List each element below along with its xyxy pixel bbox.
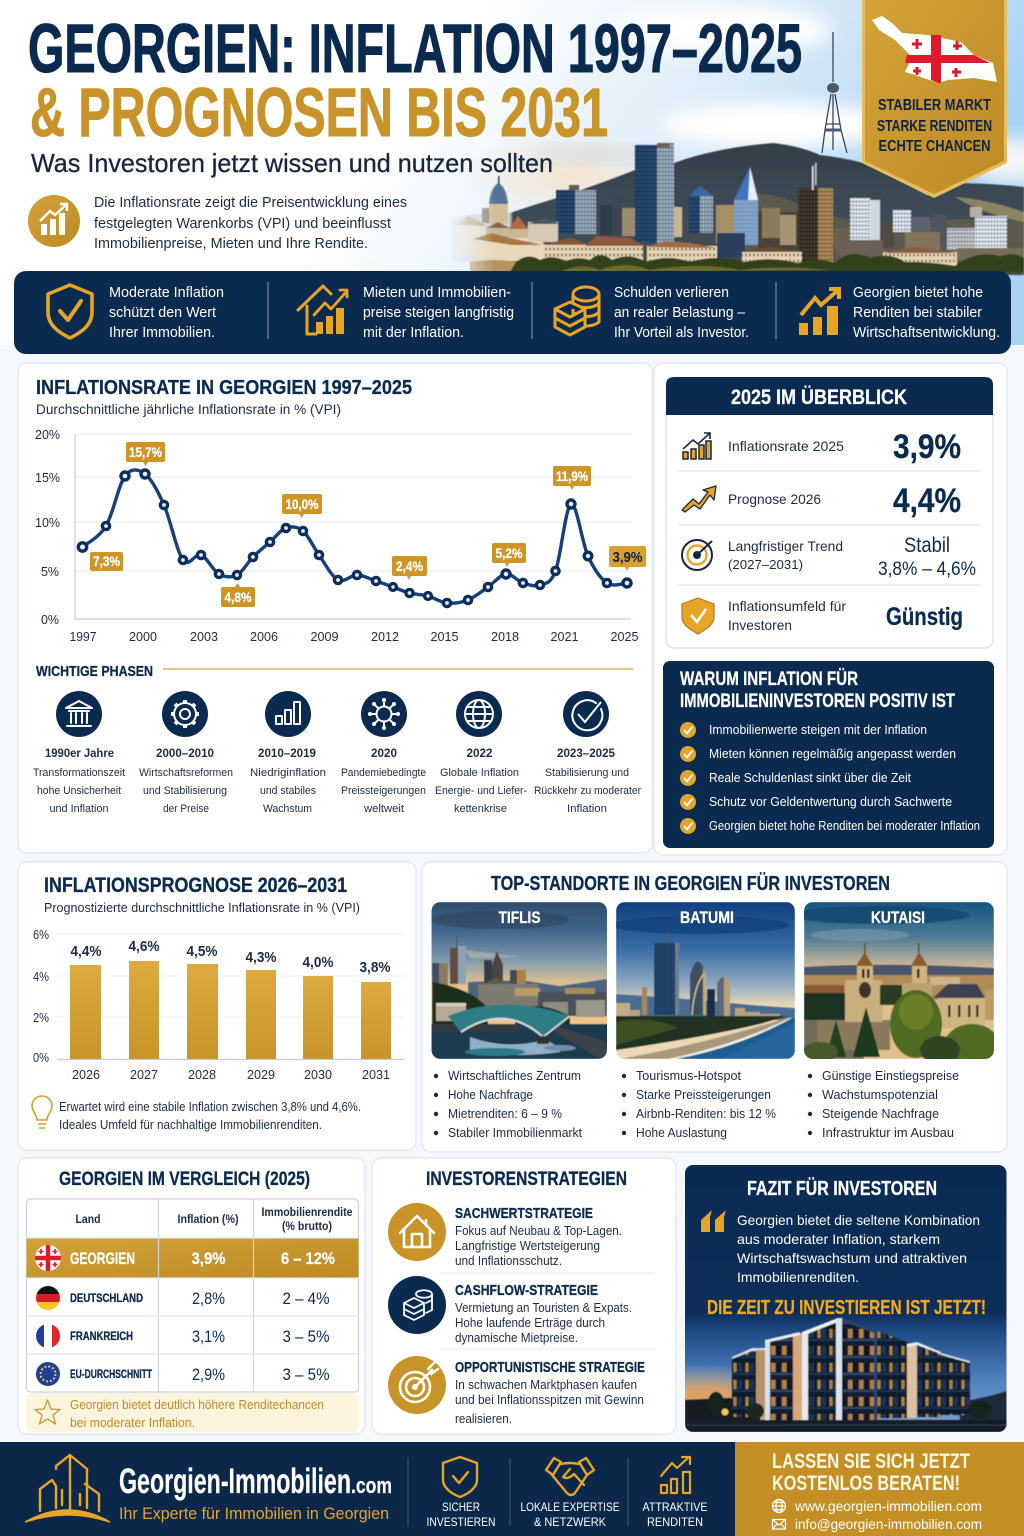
list: Batumi: Airbnb-Renditen: bis 12 % — [636, 1106, 776, 1121]
benefit text 2: preise steigen langfristig — [363, 304, 514, 321]
list: Kutaisi: Günstige Einstiegspreise — [822, 1068, 959, 1083]
conclusion text: Wirtschaftswachstum und attraktiven — [737, 1250, 967, 1266]
row: EU: EU-DURCHSCHNITT — [70, 1367, 152, 1381]
comparison table: Land — [76, 1214, 100, 1226]
panel: why inflation is positive — [663, 661, 994, 848]
list: Batumi: Starke Preissteigerungen — [636, 1087, 771, 1102]
skyline illustration — [452, 143, 1024, 275]
panel: why inflation is positive: WARUM INFLATION FÜR — [680, 669, 858, 690]
line chart: inflation 1997-2025: 0% — [41, 612, 59, 627]
phase: 1990er Jahre — [33, 691, 125, 815]
strategy: Cashflow: Vermietung an Touristen & Expats. — [455, 1300, 632, 1315]
overview row: inflation rate — [683, 428, 961, 466]
panel: forecast — [18, 862, 416, 1150]
forecast note: Ideales Umfeld für nachhaltige Immobilienrenditen. — [59, 1118, 322, 1132]
phase: 1990er Jahre: Transformationszeit — [33, 767, 125, 779]
overview row: climate: Investoren — [728, 618, 792, 633]
icon: quote marks — [701, 1210, 726, 1232]
benefit text 1 — [109, 284, 224, 341]
intro text — [94, 194, 407, 252]
callout: 3,9% — [609, 546, 646, 571]
bar chart: forecast: 3,8% — [360, 960, 391, 976]
bar chart: forecast: 6% — [33, 928, 49, 942]
overview row: climate — [682, 598, 963, 634]
intro text: festgelegten Warenkorbs (VPI) und beeinflusst — [94, 215, 392, 232]
bar chart: forecast: 2026 — [72, 1068, 100, 1082]
list: Kutaisi: Wachstumspotenzial — [822, 1087, 938, 1102]
callout: 15,7%: 15,7% — [129, 444, 162, 460]
callout: 15,7% — [126, 442, 165, 466]
bar chart: forecast: 4,0% — [302, 955, 334, 971]
benefit text 1: schützt den Wert — [109, 304, 217, 321]
feature: safe investing — [426, 1457, 496, 1529]
panel: top locations — [422, 862, 1007, 1152]
line chart: inflation 1997-2025: 10% — [35, 515, 60, 530]
feature: local expertise: LOKALE EXPERTISE — [520, 1500, 620, 1514]
row: Georgien: 3,9% — [192, 1249, 226, 1268]
phase: 2022 — [435, 691, 527, 815]
strategy: Sachwert: Langfristige Wertsteigerung — [455, 1238, 600, 1253]
chart heading: INFLATIONSRATE IN GEORGIEN 1997–2025 — [36, 376, 412, 399]
conclusion text: aus moderater Inflation, starkem — [737, 1231, 940, 1247]
row: EU — [36, 1362, 330, 1386]
footer — [0, 1442, 1024, 1536]
line chart: inflation 1997-2025: 5% — [41, 564, 59, 579]
title — [28, 10, 802, 151]
list: Kutaisi: Steigende Nachfrage — [822, 1106, 939, 1121]
phase: 2010-2019: und stabiles — [260, 785, 316, 797]
strategy: Cashflow: Hohe laufende Erträge durch — [455, 1315, 605, 1330]
phase: 2000-2010 — [139, 691, 233, 815]
benefit text 3 — [614, 284, 749, 341]
row: Deutschland: 2 – 4% — [282, 1289, 330, 1308]
row: EU: 3 – 5% — [282, 1365, 330, 1384]
overview heading — [666, 377, 993, 415]
callout: 10,0%: 10,0% — [286, 496, 319, 512]
phase: 2020: weltweit — [363, 803, 404, 815]
bar chart: forecast: 4,4% — [70, 944, 102, 960]
list: Kutaisi: Infrastruktur im Ausbau — [822, 1125, 954, 1140]
row: EU: 2,9% — [192, 1365, 225, 1384]
chart heading: Durchschnittliche jährliche Inflationsrate in % (VPI) — [36, 402, 341, 417]
callout: 5,2%: 5,2% — [496, 545, 523, 561]
bar chart: forecast: 4,6% — [128, 939, 160, 955]
overview row: trend: (2027–2031) — [728, 557, 803, 572]
brand name: .com — [351, 1473, 392, 1498]
feature: local expertise — [520, 1458, 620, 1529]
icon: mail — [772, 1520, 786, 1529]
phase: 2010-2019: Wachstum — [263, 803, 312, 815]
callout: 3,9%: 3,9% — [612, 549, 642, 566]
overview row: forecast: Prognose 2026 — [728, 492, 821, 507]
list: Kutaisi — [808, 1068, 959, 1140]
line chart: inflation 1997-2025: 2021 — [550, 629, 578, 644]
callout: 5,2% — [492, 543, 526, 567]
icon: globe — [772, 1500, 786, 1512]
bar chart: forecast: 2% — [33, 1011, 49, 1025]
photo label: Tiflis: TIFLIS — [498, 909, 540, 927]
bar chart: forecast: 4,3% — [246, 950, 277, 966]
badge: gold ribbon: STABILER MARKT — [878, 97, 991, 114]
phase: 2010-2019: Niedriginflation — [250, 767, 326, 779]
panel: 2025 overview outer — [654, 363, 1007, 855]
panel: key benefits strip — [14, 271, 1011, 354]
strategy: Sachwert: Fokus auf Neubau & Top-Lagen. — [455, 1223, 622, 1238]
bar chart: forecast: 2028 — [188, 1068, 216, 1082]
callout: 7,3%: 7,3% — [93, 553, 120, 569]
overview row: trend: Stabil — [904, 534, 950, 557]
phase: 2020: Pandemiebedingte — [341, 767, 426, 779]
chart heading — [36, 376, 412, 417]
overview row: inflation rate: 3,9% — [893, 428, 961, 466]
line chart: inflation 1997-2025: 2006 — [250, 629, 278, 644]
comparison note: Georgien bietet deutlich höhere Renditechancen — [70, 1397, 324, 1412]
phase: 2020 — [341, 691, 426, 815]
title: & PROGNOSEN BIS 2031 — [30, 74, 608, 151]
phase: 1990er Jahre: 1990er Jahre — [45, 746, 114, 760]
row: Georgien — [35, 1245, 335, 1271]
forecast heading: INFLATIONSPROGNOSE 2026–2031 — [44, 874, 347, 897]
phase: 2000-2010: und Stabilisierung — [143, 785, 227, 797]
row: Frankreich: FRANKREICH — [70, 1329, 133, 1343]
callout: 4,8% — [221, 583, 255, 607]
line chart: inflation 1997-2025: 1997 — [70, 629, 96, 644]
strategy: Opportunistisch: und bei Inflationsspitzen mit Gewinn — [455, 1392, 644, 1407]
icon: house and chart — [298, 286, 347, 334]
phase: 1990er Jahre: und Inflation — [50, 803, 108, 815]
overview row: climate: Günstig — [886, 603, 963, 631]
comparison note — [26, 1393, 359, 1432]
TV tower — [822, 32, 847, 153]
feature: attractive returns: ATTRAKTIVE — [642, 1500, 708, 1514]
photo label: Kutaisi: KUTAISI — [871, 909, 925, 927]
photo: Kutaisi — [804, 902, 994, 1059]
panel: why inflation is positive: IMMOBILIENINVESTOREN POSITIV IST — [680, 691, 955, 712]
panel: conclusion — [685, 1165, 1006, 1432]
row: Deutschland: DEUTSCHLAND — [70, 1291, 143, 1305]
row: Frankreich: 3 – 5% — [282, 1327, 330, 1346]
phase: 2022: Globale Inflation — [440, 767, 519, 779]
strategy: Opportunistisch: In schwachen Marktphasen kaufen — [455, 1377, 637, 1392]
overview row: forecast — [682, 482, 961, 520]
benefit text 3: an realer Belastung – — [614, 304, 746, 321]
strategy: Sachwert — [388, 1203, 622, 1268]
comparison table — [26, 1199, 358, 1392]
subtitle: Was Investoren jetzt wissen und nutzen sollten — [31, 148, 553, 178]
panel: contact — [735, 1442, 1024, 1536]
forecast note — [59, 1100, 361, 1132]
check list: Mieten können regelmäßig angepasst werden — [709, 746, 956, 761]
bar chart: forecast: 2030 — [304, 1068, 332, 1082]
benefit text 4: Renditen bei stabiler — [853, 304, 982, 321]
brand name: Ihr Experte für Immobilien in Georgien — [119, 1504, 389, 1523]
check list: Immobilienwerte steigen mit der Inflation — [709, 722, 927, 737]
photo: Batumi — [610, 902, 795, 1059]
comparison table: Inflation (%) — [178, 1214, 239, 1226]
feature: safe investing: INVESTIEREN — [426, 1515, 496, 1529]
check list — [680, 722, 980, 834]
intro text: Immobilienpreise, Mieten und Ihre Rendite. — [94, 235, 368, 252]
strategies heading: INVESTORENSTRATEGIEN — [426, 1168, 627, 1190]
panel: contact: info@georgien-immobilien.com — [795, 1516, 982, 1532]
photo label: Batumi: BATUMI — [680, 909, 734, 927]
badge: gold ribbon: ECHTE CHANCEN — [878, 138, 990, 155]
benefit text 4: Wirtschaftsentwicklung. — [853, 324, 1000, 341]
line chart: inflation 1997-2025: 2025 — [610, 629, 638, 644]
list: Tiflis: Mietrenditen: 6 – 9 % — [448, 1106, 562, 1121]
phase: 2020: 2020 — [371, 746, 397, 760]
list: Batumi: Hohe Auslastung — [636, 1125, 727, 1140]
conclusion text — [737, 1212, 980, 1285]
benefit text 4: Georgien bietet hohe — [853, 284, 983, 301]
line chart: inflation 1997-2025: 2003 — [190, 629, 218, 644]
overview row: forecast: 4,4% — [893, 482, 961, 520]
feature: safe investing: SICHER — [442, 1500, 480, 1514]
feature: attractive returns: RENDITEN — [647, 1515, 703, 1529]
illustration: apartment building — [685, 1318, 1007, 1432]
callout: 11,9%: 11,9% — [556, 468, 588, 484]
benefit text 1: Ihrer Immobilien. — [109, 324, 215, 341]
comparison note: bei moderater Inflation. — [70, 1415, 195, 1430]
intro text: Die Inflationsrate zeigt die Preisentwicklung eines — [94, 194, 407, 211]
phase: 2020: Preissteigerungen — [341, 785, 426, 797]
overview row: inflation rate: Inflationsrate 2025 — [728, 439, 844, 454]
icon: growth chart — [799, 289, 839, 335]
phase: 2023-2025: Stabilisierung und — [545, 767, 629, 779]
bar chart: forecast: 4,5% — [186, 944, 218, 960]
strategy: Cashflow: dynamische Mietpreise. — [455, 1330, 578, 1345]
line chart: inflation 1997-2025: 20% — [35, 427, 60, 442]
phase: 1990er Jahre: hohe Unsicherheit — [37, 785, 121, 797]
line chart: inflation 1997-2025 — [35, 427, 646, 644]
phase: 2023-2025: Rückkehr zu moderater — [534, 785, 641, 797]
phase: 2023-2025: 2023–2025 — [557, 746, 615, 760]
benefit text 2 — [363, 284, 514, 341]
line chart: inflation 1997-2025: 15% — [35, 470, 60, 485]
line chart: inflation 1997-2025: 2015 — [430, 629, 458, 644]
overview row: climate: Inflationsumfeld für — [728, 599, 846, 614]
line chart: inflation 1997-2025: 2018 — [491, 629, 519, 644]
header sky — [0, 0, 1024, 365]
panel: contact: www.georgien-immobilien.com — [794, 1498, 982, 1514]
panel: contact: KOSTENLOS BERATEN! — [772, 1472, 960, 1495]
callout: 2,4%: 2,4% — [396, 558, 423, 574]
list: Tiflis: Hohe Nachfrage — [448, 1087, 533, 1102]
feature: local expertise: & NETZWERK — [534, 1515, 606, 1529]
phase: 2022: Energie- und Liefer- — [435, 785, 527, 797]
icon: shield — [48, 285, 92, 338]
list: Tiflis — [434, 1068, 582, 1140]
strategy: Opportunistisch: OPPORTUNISTISCHE STRATEGIE — [455, 1360, 645, 1376]
benefit text 3: Ihr Vorteil als Investor. — [614, 324, 749, 341]
overview card — [666, 405, 993, 648]
phase: 2010-2019 — [250, 691, 326, 815]
overview row: trend: Langfristiger Trend — [728, 539, 843, 554]
phase: 2010-2019: 2010–2019 — [258, 746, 316, 760]
benefit text 1: Moderate Inflation — [109, 284, 224, 301]
comparison heading: GEORGIEN IM VERGLEICH (2025) — [59, 1168, 310, 1190]
panel: contact: LASSEN SIE SICH JETZT — [772, 1450, 970, 1473]
panel: strategies — [372, 1158, 676, 1434]
phase: 2000-2010: der Preise — [163, 803, 209, 815]
list: Batumi — [622, 1068, 776, 1140]
phase: 2000-2010: 2000–2010 — [156, 746, 214, 760]
bar chart: forecast: 0% — [33, 1051, 49, 1065]
icon: logo — [25, 1455, 110, 1522]
bar chart: forecast: 4% — [33, 970, 49, 984]
row: Frankreich — [36, 1324, 330, 1348]
overview row: trend — [682, 534, 976, 580]
benefit text 2: mit der Inflation. — [363, 324, 464, 341]
phase: 2022: 2022 — [466, 746, 493, 760]
icon: light bulb — [32, 1096, 52, 1128]
badge: gold ribbon: STARKE RENDITEN — [877, 118, 992, 135]
benefit text 4 — [853, 284, 1000, 341]
icon: rising chart badge — [28, 195, 80, 247]
forecast heading: Prognostizierte durchschnittliche Inflationsrate in % (VPI) — [44, 900, 360, 915]
check list: Schutz vor Geldentwertung durch Sachwerte — [709, 794, 952, 809]
check list: Reale Schuldenlast sinkt über die Zeit — [709, 770, 911, 785]
brand name: Georgien-Immobilien — [119, 1462, 351, 1501]
brand name — [119, 1462, 392, 1523]
bar chart: forecast: 2029 — [247, 1068, 275, 1082]
row: Georgien: GEORGIEN — [70, 1249, 135, 1268]
phase: 2023-2025: Inflation — [567, 803, 607, 815]
row: Deutschland — [36, 1286, 330, 1310]
callout: 4,8%: 4,8% — [224, 589, 252, 605]
bar chart: forecast: 2027 — [130, 1068, 158, 1082]
conclusion text: Georgien bietet die seltene Kombination — [737, 1212, 980, 1228]
phase: 2022: kettenkrise — [454, 803, 507, 815]
list: Tiflis: Stabiler Immobilienmarkt — [448, 1125, 582, 1140]
list: Batumi: Tourismus-Hotspot — [636, 1068, 741, 1083]
conclusion heading: FAZIT FÜR INVESTOREN — [747, 1177, 937, 1200]
callout: 2,4% — [392, 556, 427, 580]
callout: 11,9% — [553, 466, 591, 490]
bar chart: forecast: 2031 — [362, 1068, 390, 1082]
strategy: Sachwert: SACHWERTSTRATEGIE — [455, 1206, 593, 1222]
list: Tiflis: Wirtschaftliches Zentrum — [448, 1068, 581, 1083]
row: Frankreich: 3,1% — [192, 1327, 225, 1346]
row: Deutschland: 2,8% — [192, 1289, 225, 1308]
overview row: trend: 3,8% – 4,6% — [878, 559, 976, 580]
phase: 2000-2010: Wirtschaftsreformen — [139, 767, 233, 779]
strategy: Sachwert: und Inflationsschutz. — [455, 1253, 562, 1268]
forecast heading — [44, 874, 360, 915]
photo: Tiflis — [430, 902, 608, 1059]
line chart: inflation 1997-2025: 2012 — [371, 629, 399, 644]
strategy: Cashflow: CASHFLOW-STRATEGIE — [455, 1283, 598, 1299]
benefit text 2: Mieten und Immobilien- — [363, 284, 511, 301]
panel: inflation chart — [18, 363, 652, 853]
bar chart: forecast — [33, 928, 404, 1082]
strategy: Cashflow — [388, 1276, 632, 1345]
forecast note: Erwartet wird eine stabile Inflation zwischen 3,8% und 4,6%. — [59, 1100, 361, 1114]
locations heading: TOP-STANDORTE IN GEORGIEN FÜR INVESTOREN — [491, 872, 890, 895]
panel: comparison — [18, 1158, 365, 1434]
phases heading: WICHTIGE PHASEN — [36, 663, 153, 680]
callout: 10,0% — [282, 494, 322, 518]
phase: 2023-2025 — [534, 691, 641, 815]
badge: gold ribbon — [862, 0, 1007, 198]
strategy: Opportunistisch — [388, 1356, 645, 1426]
line chart: inflation 1997-2025: 2009 — [310, 629, 338, 644]
comparison table: Immobilienrendite — [262, 1207, 352, 1219]
line chart: inflation 1997-2025: 2000 — [129, 629, 157, 644]
comparison table: (% brutto) — [282, 1221, 332, 1233]
conclusion text: Immobilienrenditen. — [737, 1269, 859, 1285]
check list: Georgien bietet hohe Renditen bei moderater Inflation — [709, 818, 980, 833]
overview heading: 2025 IM ÜBERBLICK — [731, 386, 907, 409]
row: Georgien: 6 – 12% — [281, 1249, 335, 1268]
benefit text 3: Schulden verlieren — [614, 284, 729, 301]
feature: attractive returns — [642, 1457, 708, 1529]
icon: coin stacks — [555, 287, 599, 335]
strategy: Opportunistisch: realisieren. — [455, 1411, 512, 1426]
